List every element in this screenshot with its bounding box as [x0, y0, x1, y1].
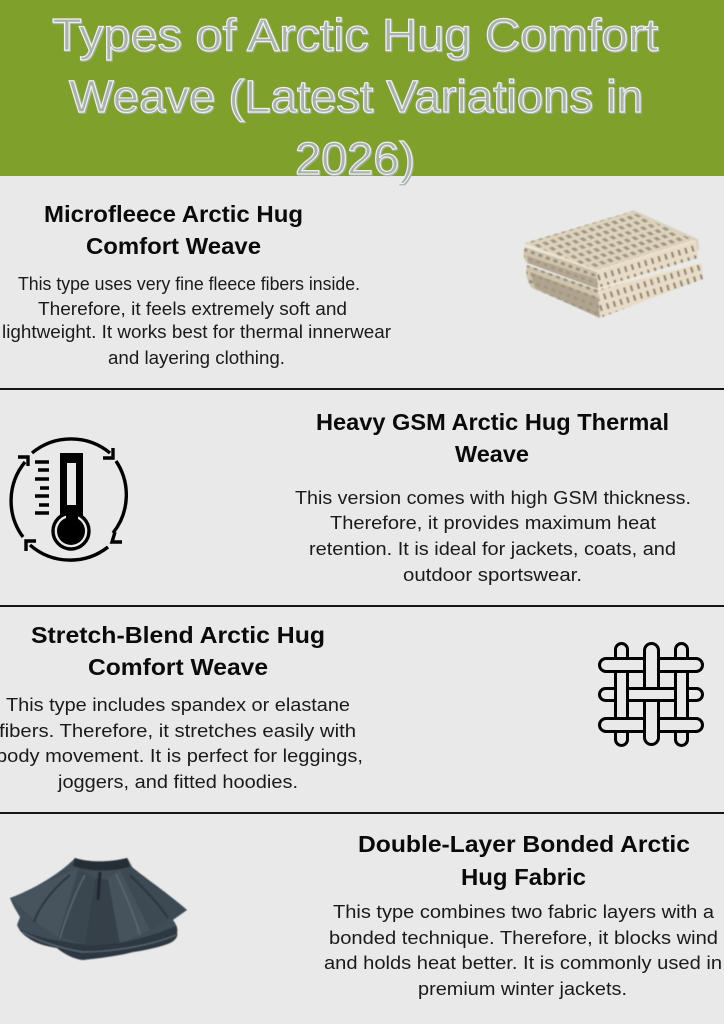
text block: double-layer bonded description: premium winter jackets.: [418, 979, 627, 999]
heading: double-layer bonded: [358, 831, 690, 890]
title: Types of Arctic Hug Comfort: [52, 10, 659, 60]
heading: microfleece: [44, 201, 303, 259]
text block: microfleece description: and layering clothing.: [108, 348, 285, 368]
icon: thermometer with cycle arrows: [11, 439, 126, 560]
text block: stretch-blend description: [0, 695, 363, 792]
title: Types of Arctic Hug Comfort: [53, 10, 660, 62]
text block: double-layer bonded description: bonded technique. Therefore, it blocks wind: [329, 928, 718, 948]
text block: double-layer bonded description: and holds heat better. It is commonly used in: [324, 953, 722, 973]
heading: stretch-blend: Stretch-Blend Arctic Hug: [31, 622, 325, 648]
text block: microfleece description: This type uses very fine fleece fibers inside.: [18, 274, 360, 294]
heading: heavy GSM: Weave: [455, 441, 529, 467]
text block: stretch-blend description: This type includes spandex or elastane: [6, 695, 350, 715]
heading: double-layer bonded: Hug Fabric: [461, 864, 586, 890]
panel: double-layer bonded: [10, 831, 722, 999]
text block: heavy GSM description: retention. It is ideal for jackets, coats, and: [309, 539, 676, 559]
title: Weave (Latest Variations in: [69, 71, 643, 122]
header band: [0, 0, 724, 176]
icon: woven fabric: [600, 644, 702, 746]
heading: stretch-blend: Comfort Weave: [88, 654, 268, 680]
title: Weave (Latest Variations in: [70, 72, 644, 123]
title: 2026): [296, 134, 416, 185]
divider 3: [0, 812, 724, 814]
text block: heavy GSM description: Therefore, it provides maximum heat: [330, 513, 656, 533]
title: 2026): [295, 133, 415, 184]
text block: microfleece description: lightweight. It works best for thermal innerwear: [2, 322, 391, 342]
text block: heavy GSM description: This version comes with high GSM thickness.: [295, 488, 691, 508]
heading: double-layer bonded: Double-Layer Bonded Arctic: [358, 831, 690, 857]
image: dark layered skirt: [10, 857, 187, 962]
text block: stretch-blend description: body movement. It is perfect for leggings,: [0, 746, 363, 766]
panel: heavy GSM: [11, 409, 691, 585]
heading: microfleece: Comfort Weave: [86, 233, 261, 259]
heading: microfleece: Microfleece Arctic Hug: [44, 201, 303, 227]
panel: stretch-blend: [0, 622, 702, 792]
text block: stretch-blend description: joggers, and fitted hoodies.: [57, 772, 298, 792]
image: folded waffle blanket: [524, 211, 703, 318]
text block: double-layer bonded description: This type combines two fabric layers with a: [333, 902, 715, 922]
heading: stretch-blend: [31, 622, 325, 680]
text block: stretch-blend description: fibers. Therefore, it stretches easily with: [0, 721, 356, 741]
panel: microfleece: [2, 201, 703, 368]
title: [52, 10, 660, 185]
text block: heavy GSM description: outdoor sportswear.: [403, 565, 582, 585]
text block: heavy GSM description: [295, 488, 691, 585]
divider 2: [0, 605, 724, 607]
text block: microfleece description: [2, 274, 391, 368]
heading: heavy GSM: Heavy GSM Arctic Hug Thermal: [316, 409, 669, 435]
divider 1: [0, 388, 724, 390]
heading: heavy GSM: [316, 409, 669, 467]
text block: microfleece description: Therefore, it feels extremely soft and: [38, 299, 347, 319]
text block: double-layer bonded description: [324, 902, 722, 999]
